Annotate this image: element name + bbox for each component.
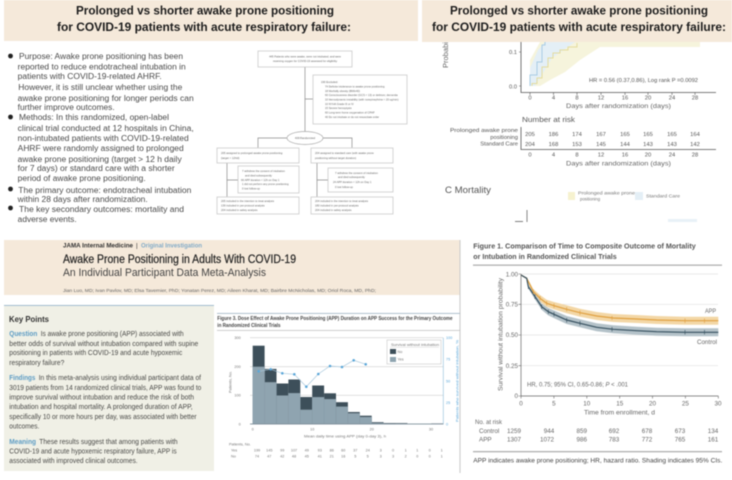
legend: survival without intubation: Survival without intubation xyxy=(391,343,439,347)
legend: survival without intubation: Yes xyxy=(398,358,404,362)
bar chart: patients by mean daily APP time: 75 xyxy=(446,357,450,361)
flowchart: trial enrollment: 60 Consciousness disorder (GCS < 13) or delirium; dementia xyxy=(325,93,398,97)
figure heading: Figure 3. Dose Effect of Awake Prone Positioning (APP) Duration on APP Success for the Primary Outcome xyxy=(217,316,453,322)
survival curve fragment: Probabi xyxy=(443,42,450,68)
line chart: survival without intubation: APP xyxy=(705,308,716,315)
number at risk table: 145 xyxy=(596,142,606,148)
flowchart: trial enrollment: 139 included in per-protocol analysis xyxy=(221,204,265,208)
table: patients per bin: 99 xyxy=(280,448,284,452)
table: patients per bin: 3 xyxy=(380,454,382,458)
table: patients per bin: 5 xyxy=(354,454,356,458)
legend: survival without intubation: No xyxy=(398,350,402,354)
table: number at risk: 944 xyxy=(544,428,555,435)
footnote: APP indicates awake prone positioning; HR, hazard ratio. Shading indicates 95% CIs. xyxy=(473,458,722,465)
table: patients per bin: 145 xyxy=(266,448,272,452)
line chart: survival without intubation: Survival without intubation probability xyxy=(498,277,504,391)
number at risk table: 186 xyxy=(549,132,558,138)
number at risk table: 204 xyxy=(525,142,536,148)
journal line: Original Investigation xyxy=(141,242,202,250)
flowchart: trial enrollment: 60 Long-term home oxygenation of CPAP xyxy=(325,110,375,114)
flowchart: trial enrollment: 40 Do not intubate or do not resuscitate order xyxy=(325,115,379,119)
title band: right slide: Prolonged vs shorter awake prone positioning xyxy=(450,6,708,18)
journal line: JAMA Internal Medicine xyxy=(63,242,133,250)
table: patients per bin: 1 xyxy=(416,448,418,452)
table: patients per bin: 0 xyxy=(416,454,418,458)
flowchart: trial enrollment: 180 included in per-protocol analysis xyxy=(315,204,359,208)
line chart: survival without intubation: 0 xyxy=(514,393,518,400)
table: patients per bin: 37 xyxy=(353,448,357,452)
survival curve fragment: 8 xyxy=(575,96,579,102)
line chart: survival without intubation: Time from enrollment, d xyxy=(584,410,656,416)
number at risk table: 164 xyxy=(690,132,701,138)
flowchart: trial enrollment: 204 assigned to standard care (with awake prone xyxy=(315,151,374,155)
flowchart: trial enrollment xyxy=(217,51,407,214)
table: patients per bin: 21 xyxy=(330,454,334,458)
table: patients per bin: 1 xyxy=(441,454,443,458)
number at risk table: Prolonged awake prone xyxy=(450,128,518,134)
panel: figure 3 dose effect xyxy=(217,240,460,473)
flowchart: trial enrollment: 0 lost follow-up xyxy=(335,185,353,189)
question: positioning in patients with COVID-19 and acute hypoxemic xyxy=(9,350,183,357)
bullet list: study summary: The primary outcome: endotracheal intubation xyxy=(18,186,191,195)
number at risk table: Standard Care xyxy=(480,142,518,148)
table: number at risk: 772 xyxy=(642,436,653,444)
line chart: survival without intubation: 30 xyxy=(714,400,722,408)
number at risk table: 20 xyxy=(645,152,651,158)
survival curve fragment: 16 xyxy=(622,96,628,102)
flowchart: trial enrollment: 190 Excluded: xyxy=(321,80,338,84)
mortality chart heading and legend: Prolonged awake prone xyxy=(578,190,636,196)
line chart: survival without intubation: 5 xyxy=(552,400,556,408)
bullet list: study summary: for 7 days) or standard care with a shorter xyxy=(18,164,175,173)
survival curve fragment: 28 xyxy=(692,96,698,102)
article title xyxy=(63,254,296,279)
question: respiratory failure? xyxy=(9,360,64,367)
number at risk table: Number at risk xyxy=(522,115,575,124)
number at risk table: 24 xyxy=(669,152,676,158)
figure heading: or Intubation in Randomized Clinical Trials xyxy=(473,252,617,261)
number at risk table: 144 xyxy=(620,142,631,148)
panel: figure 1 survival curves xyxy=(473,242,722,465)
bar chart: patients by mean daily APP time: Patients who survived without intubation, % xyxy=(456,339,460,422)
flowchart: trial enrollment: and died subsequently xyxy=(245,174,273,178)
table: number at risk: APP xyxy=(479,436,492,444)
table: patients per bin: 47 xyxy=(267,454,271,458)
flowchart: trial enrollment: 15 Severe hemoptysis xyxy=(325,106,352,110)
bullet list: study summary: further improve outcomes. xyxy=(18,103,115,112)
table: number at risk: 673 xyxy=(675,428,686,435)
number at risk table: 165 xyxy=(667,132,677,138)
bullet list: study summary: non-intubated patients with COVID-19-related xyxy=(18,134,189,143)
panel: key points: Key Points xyxy=(9,315,49,324)
survival curve fragment xyxy=(443,42,716,110)
mortality chart heading and legend xyxy=(445,185,697,222)
number at risk table: Days after randomization (days) xyxy=(566,160,671,168)
line chart: survival without intubation: 0.50 xyxy=(506,332,518,339)
bar chart: patients by mean daily APP time: 10 xyxy=(310,428,314,432)
table: number at risk: 859 xyxy=(576,428,587,435)
table: patients per bin: 5 xyxy=(367,454,369,458)
flowchart: trial enrollment: 204 included in safety analysis xyxy=(315,208,352,212)
line chart: survival without intubation: 0.75 xyxy=(506,302,518,308)
table: number at risk xyxy=(475,419,719,444)
flowchart: trial enrollment: 18 Morbidly obesity (BMI≥40) xyxy=(325,89,360,93)
figure heading: in Randomized Clinical Trials xyxy=(217,323,281,329)
number at risk table: 167 xyxy=(596,132,606,138)
bar chart: patients by mean daily APP time: 30 xyxy=(429,428,433,432)
table: number at risk: 986 xyxy=(576,436,587,444)
number at risk table: 165 xyxy=(620,132,630,138)
flowchart: trial enrollment: 10 Hemodynamic instability (with norepinephrine > 20 ug/min) xyxy=(325,98,399,102)
line chart: survival without intubation: HR, 0.75; 95% CI, 0.65-0.86; P < .001 xyxy=(527,382,628,388)
figure heading: Figure 1. Comparison of Time to Composite Outcome of Mortality xyxy=(473,242,696,250)
table: number at risk: Control xyxy=(479,428,499,435)
bullet list: study summary: reported to reduce endotracheal intubation in xyxy=(18,63,186,72)
journal line xyxy=(63,242,202,250)
bullet list: study summary: patients with COVID-19-related AHRF. xyxy=(18,72,162,81)
number at risk table: 142 xyxy=(690,142,700,148)
table: patients per bin: 2 xyxy=(405,454,407,458)
findings: outcomes. xyxy=(9,424,39,430)
table: patients per bin: 93 xyxy=(318,448,322,452)
bullet list: study summary: awake prone positioning for longer periods can xyxy=(18,94,194,103)
number at risk table: 143 xyxy=(667,142,677,148)
bullet list: study summary: clinical trial conducted at 12 hospitals in China, xyxy=(18,124,194,133)
line chart: survival without intubation: 0 xyxy=(519,400,523,408)
flowchart: trial enrollment: 74 Definite intolerance to awake prone positioning xyxy=(325,84,385,88)
authors: Jian Luo, MD; Ivan Pavlov, MD; Elsa Tavernier, PhD; Yonatan Perez, MD; Aileen Kharat, MD; Bairbre McNicholas, MD; Oriol Roca, MD, PhD; xyxy=(63,288,376,293)
article title: An Individual Participant Data Meta-Analysis xyxy=(63,267,267,279)
title band: left slide: for COVID-19 patients with acute respiratory failure: xyxy=(57,22,351,34)
bullet list: study summary: period of awake prone positioning. xyxy=(18,174,146,183)
flowchart: trial enrollment: 24 APP duration < 12h on Day 1 xyxy=(333,180,372,184)
bar chart: patients by mean daily APP time: 0 xyxy=(446,422,448,426)
bullet list: study summary: awake prone positioning (target > 12 h daily xyxy=(18,155,182,164)
number at risk table: 0 xyxy=(528,152,532,158)
panel: purpose and methods slide xyxy=(4,0,418,224)
table: patients per bin: 0 xyxy=(429,454,431,458)
findings: intubation and hospital mortality. A prolonged duration of APP, xyxy=(9,404,193,411)
survival curve fragment: 0.0 xyxy=(509,84,517,90)
line chart: survival without intubation: 25 xyxy=(682,400,689,408)
number at risk table: 4 xyxy=(552,152,556,158)
bar chart: patients by mean daily APP time: 300 xyxy=(234,336,241,340)
meaning: COVID-19 and acute hypoxemic respiratory failure, APP is xyxy=(9,448,177,456)
flowchart: trial enrollment: 66 APP duration < 12h on Day 1 xyxy=(241,178,280,182)
number at risk table: 174 xyxy=(572,132,583,138)
survival curve fragment: 4 xyxy=(552,96,556,102)
table: patients per bin: Patients, No. xyxy=(229,442,251,446)
findings: improve survival without intubation and reduce the risk of both xyxy=(9,394,194,402)
survival curve fragment: 12 xyxy=(598,96,604,102)
findings xyxy=(9,375,201,430)
bar chart: patients by mean daily APP time: 25 xyxy=(446,401,450,405)
bar chart: patients by mean daily APP time: Mean daily time using APP (day 0-day 3), h xyxy=(304,434,386,438)
table: patients per bin: No xyxy=(231,454,236,458)
table: patients per bin: 24 xyxy=(366,448,370,452)
flowchart: trial enrollment: 204 included in the intention to treat analysis xyxy=(315,199,369,203)
article title: Awake Prone Positioning in Adults With COVID-19 xyxy=(63,254,296,266)
flowchart: trial enrollment: 205 assigned to prolonged awake prone positioning xyxy=(221,151,283,155)
number at risk table: 16 xyxy=(622,152,628,158)
table: patients per bin: 0 xyxy=(392,448,394,452)
mortality chart heading and legend: C Mortality xyxy=(445,185,492,195)
panel: key points xyxy=(4,305,214,471)
findings: Findings xyxy=(9,375,35,382)
line chart: survival without intubation: 0.25 xyxy=(506,363,518,370)
table: patients per bin: 0 xyxy=(429,448,431,452)
table: number at risk: 1259 xyxy=(507,428,521,435)
bar chart: patients by mean daily APP time: 20 xyxy=(370,428,374,432)
survival curve fragment: 0 xyxy=(528,96,532,102)
number at risk table: 205 xyxy=(525,132,535,138)
bar chart: patients by mean daily APP time: 100 xyxy=(234,394,241,398)
flowchart: trial enrollment: 204 included in safety analysis xyxy=(221,208,258,212)
bullet list: study summary: Methods: In this randomized, open-label xyxy=(19,113,169,122)
bar chart: patients by mean daily APP time: 50 xyxy=(446,379,450,383)
table: patients per bin: 1 xyxy=(441,448,443,452)
survival curve fragment: Days after randomization (days) xyxy=(566,103,671,110)
table: number at risk: 783 xyxy=(609,436,620,444)
line chart: survival without intubation: 10 xyxy=(583,400,591,408)
table: patients per bin: 1 xyxy=(405,448,407,452)
figure heading xyxy=(473,242,696,261)
table: number at risk: 1307 xyxy=(507,436,521,444)
table: number at risk: 765 xyxy=(675,436,686,444)
table: patients per bin: 41 xyxy=(318,454,322,458)
line chart: survival without intubation: Control xyxy=(697,339,717,346)
flowchart: trial enrollment: 7 withdrew the consent of intubation xyxy=(335,171,378,175)
flowchart: trial enrollment: positioning without target duration) xyxy=(315,156,356,160)
number at risk table: 28 xyxy=(692,152,698,158)
bullet list: study summary: AHRF were randomly assigned to prolonged xyxy=(18,144,184,153)
table: patients per bin: 86 xyxy=(330,448,334,452)
bar chart: patients by mean daily APP time: Patients, No. xyxy=(228,371,232,393)
number at risk table: 143 xyxy=(643,142,653,148)
title band: left slide xyxy=(4,0,418,41)
bullet list: study summary: Purpose: Awake prone positioning has been xyxy=(19,52,183,61)
legend: survival without intubation xyxy=(387,340,441,364)
table: patients per bin xyxy=(229,442,443,458)
number at risk table: 12 xyxy=(598,152,604,158)
number at risk table: 153 xyxy=(572,142,582,148)
table: number at risk: 678 xyxy=(642,428,653,435)
table: patients per bin: 199 xyxy=(254,448,260,452)
table: patients per bin: 45 xyxy=(305,454,309,458)
survival curve fragment: 0.1 xyxy=(509,50,517,56)
title band: right slide: for COVID-19 patients with acute respiratory failure: xyxy=(432,22,726,34)
number at risk table: 168 xyxy=(549,142,558,148)
flowchart: trial enrollment: (target > 12h/d) xyxy=(221,156,240,160)
flowchart: trial enrollment: receiving oxygen for COVID-19 assessed for eligibility xyxy=(273,59,338,63)
figure heading xyxy=(217,316,453,329)
bar chart: patients by mean daily APP time xyxy=(228,336,460,438)
bar chart: patients by mean daily APP time: 200 xyxy=(234,365,241,369)
panel: JAMA article header xyxy=(4,240,460,295)
bullet list: study summary xyxy=(8,52,194,224)
table: patients per bin: 3 xyxy=(380,448,382,452)
bullet list: study summary: within 28 days after randomization. xyxy=(17,195,148,204)
flowchart: trial enrollment: 0 lost follow-up xyxy=(242,186,260,190)
line chart: survival without intubation: 20 xyxy=(649,400,656,408)
question xyxy=(9,331,198,367)
findings: 3019 patients from 14 randomized clinical trials, APP was found to xyxy=(9,385,201,392)
line chart: survival without intubation xyxy=(498,272,722,416)
flowchart: trial enrollment: and died subsequently xyxy=(338,175,366,179)
flowchart: trial enrollment: 1 did not perform any prone positioning xyxy=(242,182,289,186)
flowchart: trial enrollment: 409 Randomized xyxy=(295,136,316,140)
table: patients per bin: 16 xyxy=(341,454,345,458)
flowchart: trial enrollment: 205 included in the intention to treat analysis xyxy=(221,199,275,203)
survival curve fragment: HR = 0.56 (0.37,0.86), Log rank P =0.0092 xyxy=(589,78,698,84)
table: patients per bin: 49 xyxy=(305,448,309,452)
meaning: Meaning xyxy=(9,439,36,446)
number at risk table: 165 xyxy=(643,132,653,138)
table: patients per bin: 107 xyxy=(291,448,297,452)
mortality chart heading and legend: positioning xyxy=(580,196,601,202)
table: patients per bin: 60 xyxy=(341,448,345,452)
question: better odds of survival without intubation compared with supine xyxy=(9,341,198,348)
bullet list: study summary: adverse events. xyxy=(18,215,77,224)
journal line: | xyxy=(136,242,138,250)
bullet list: study summary: However, it is still unclear whether using the xyxy=(18,83,183,92)
line chart: survival without intubation: 15 xyxy=(616,400,624,408)
mortality chart heading and legend: Standard Care xyxy=(646,194,681,198)
meaning: These results suggest that among patients with xyxy=(39,439,178,446)
line chart: survival without intubation: 1.00 xyxy=(506,272,518,278)
question: Question xyxy=(9,331,37,338)
number at risk table: positioning xyxy=(490,135,518,141)
bar chart: patients by mean daily APP time: 100 xyxy=(446,336,452,340)
number at risk table xyxy=(450,115,716,168)
bar chart: patients by mean daily APP time: 0 xyxy=(252,428,254,432)
table: patients per bin: 48 xyxy=(292,454,296,458)
title band: right slide xyxy=(422,0,732,42)
table: number at risk: 161 xyxy=(708,436,719,444)
table: patients per bin: Yes xyxy=(231,448,237,452)
flowchart: trial enrollment: 445 Patients who were awake, were not intubated, and were xyxy=(269,54,341,58)
findings: In this meta-analysis using individual participant data of xyxy=(39,375,201,382)
findings: specifically 10 or more hours per day, was associated with better xyxy=(9,414,197,421)
table: patients per bin: 74 xyxy=(255,454,259,458)
bar chart: patients by mean daily APP time: 0 xyxy=(239,422,241,426)
survival curve fragment: 24 xyxy=(669,96,676,102)
survival curve fragment: 20 xyxy=(645,96,651,102)
meaning: associated with improved clinical outcomes. xyxy=(9,458,138,465)
panel: time to intubation slide xyxy=(422,0,732,222)
table: number at risk: 692 xyxy=(609,428,620,435)
table: number at risk: No. at risk xyxy=(475,419,503,426)
flowchart: trial enrollment: 7 withdrew the consent of intubation xyxy=(242,169,285,173)
meaning xyxy=(9,439,178,465)
number at risk table: 8 xyxy=(575,152,579,158)
table: patients per bin: 42 xyxy=(280,454,284,458)
table: number at risk: 1072 xyxy=(540,436,554,444)
table: patients per bin: 3 xyxy=(392,454,394,458)
title band: left slide: Prolonged vs shorter awake prone positioning xyxy=(76,6,334,18)
flowchart: trial enrollment: 10 NYHA Grade III or IV xyxy=(325,102,354,106)
table: number at risk: 134 xyxy=(708,428,719,435)
question: Is awake prone positioning (APP) associated with xyxy=(41,331,184,338)
bullet list: study summary: The key secondary outcomes: mortality and xyxy=(19,205,184,214)
